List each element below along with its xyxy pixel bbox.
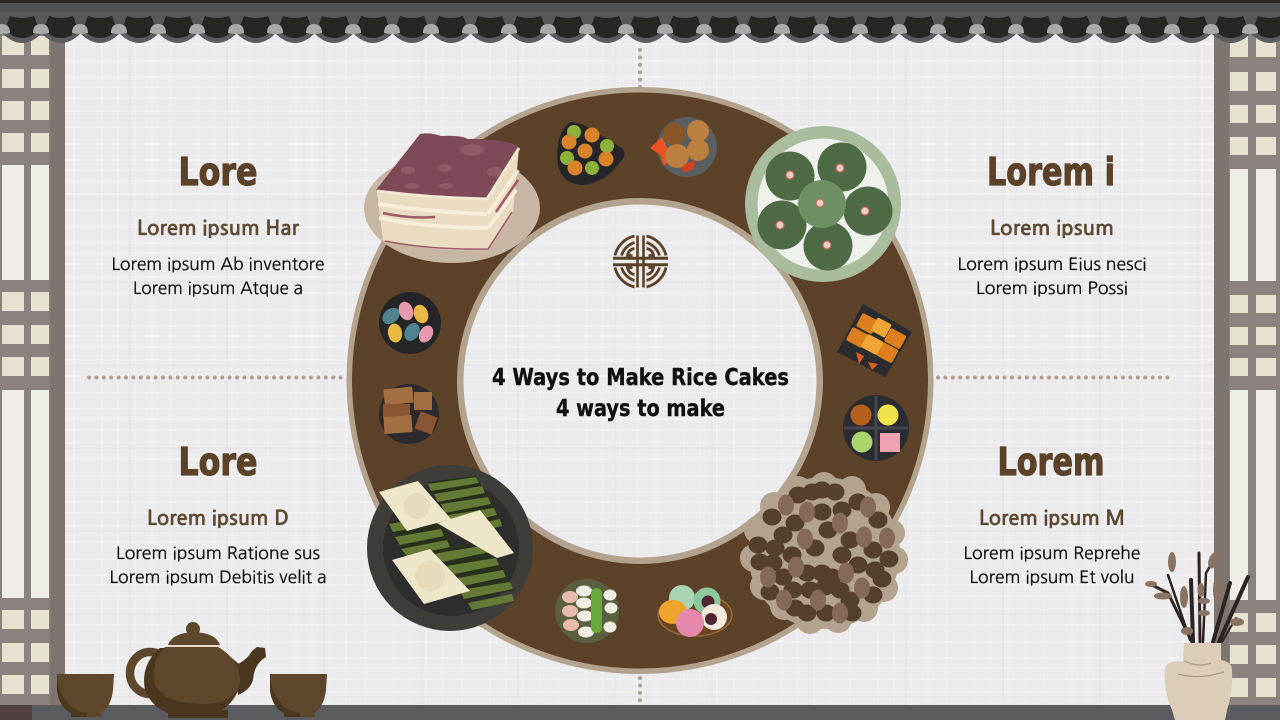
top-right text block: Lorem ipsum Eius nesci [958, 256, 1146, 273]
food: orange pastry on square tray [837, 304, 912, 377]
right lattice window [1214, 30, 1280, 706]
food: leaf rice cakes [379, 292, 441, 354]
food: square yakgwa [379, 384, 439, 444]
bottom-left text block: Lorem ipsum Debitis velit a [110, 569, 326, 586]
top-right text block: Lorem ipsum [990, 218, 1114, 238]
top-left text block [112, 150, 324, 297]
food: layered cake [364, 133, 540, 263]
food: four-section tray [843, 395, 909, 461]
food: chestnut-bean plate [740, 472, 908, 634]
food: triangle plate of sweets [557, 122, 625, 185]
top-left text block: Lore [178, 150, 258, 194]
floor [0, 705, 1280, 720]
left lattice window [0, 30, 65, 706]
top-left text block: Lorem ipsum Atque a [133, 280, 303, 297]
vase with branches [1145, 550, 1248, 720]
bottom-left text block: Lorem ipsum Ratione sus [116, 545, 320, 562]
bottom-right text block [964, 440, 1140, 586]
top-left text block: Lorem ipsum Har [137, 218, 300, 238]
top-left text block: Lorem ipsum Ab inventore [112, 256, 324, 273]
bottom-right text block: Lorem [998, 440, 1104, 484]
ring [346, 87, 934, 674]
centre title [492, 365, 789, 422]
top-right text block: Lorem ipsum Possi [976, 280, 1128, 297]
centre title: 4 ways to make [556, 396, 725, 422]
centre title: 4 Ways to Make Rice Cakes [492, 365, 789, 391]
food: green songpyeon plate [745, 126, 901, 282]
food: tteok on dark plate [367, 465, 533, 631]
top-right text block [958, 150, 1146, 297]
bottom-right text block: Lorem ipsum M [979, 508, 1125, 528]
bottom-left text block: Lore [178, 440, 258, 484]
food: mooncakes on grey plate [650, 117, 717, 177]
bottom-left text block [110, 440, 326, 586]
roof eaves [0, 0, 1280, 43]
food: pink and green rice cakes [555, 579, 619, 643]
bottom-right text block: Lorem ipsum Et volu [970, 569, 1134, 586]
bottom-right text block: Lorem ipsum Reprehe [964, 545, 1140, 562]
dotted dividers [89, 50, 1172, 704]
top-right text block: Lorem i [987, 150, 1115, 194]
food: daifuku bowl [658, 585, 732, 637]
bottom-left text block: Lorem ipsum D [147, 508, 289, 528]
teapot and cups [57, 622, 327, 718]
emblem [613, 236, 668, 288]
